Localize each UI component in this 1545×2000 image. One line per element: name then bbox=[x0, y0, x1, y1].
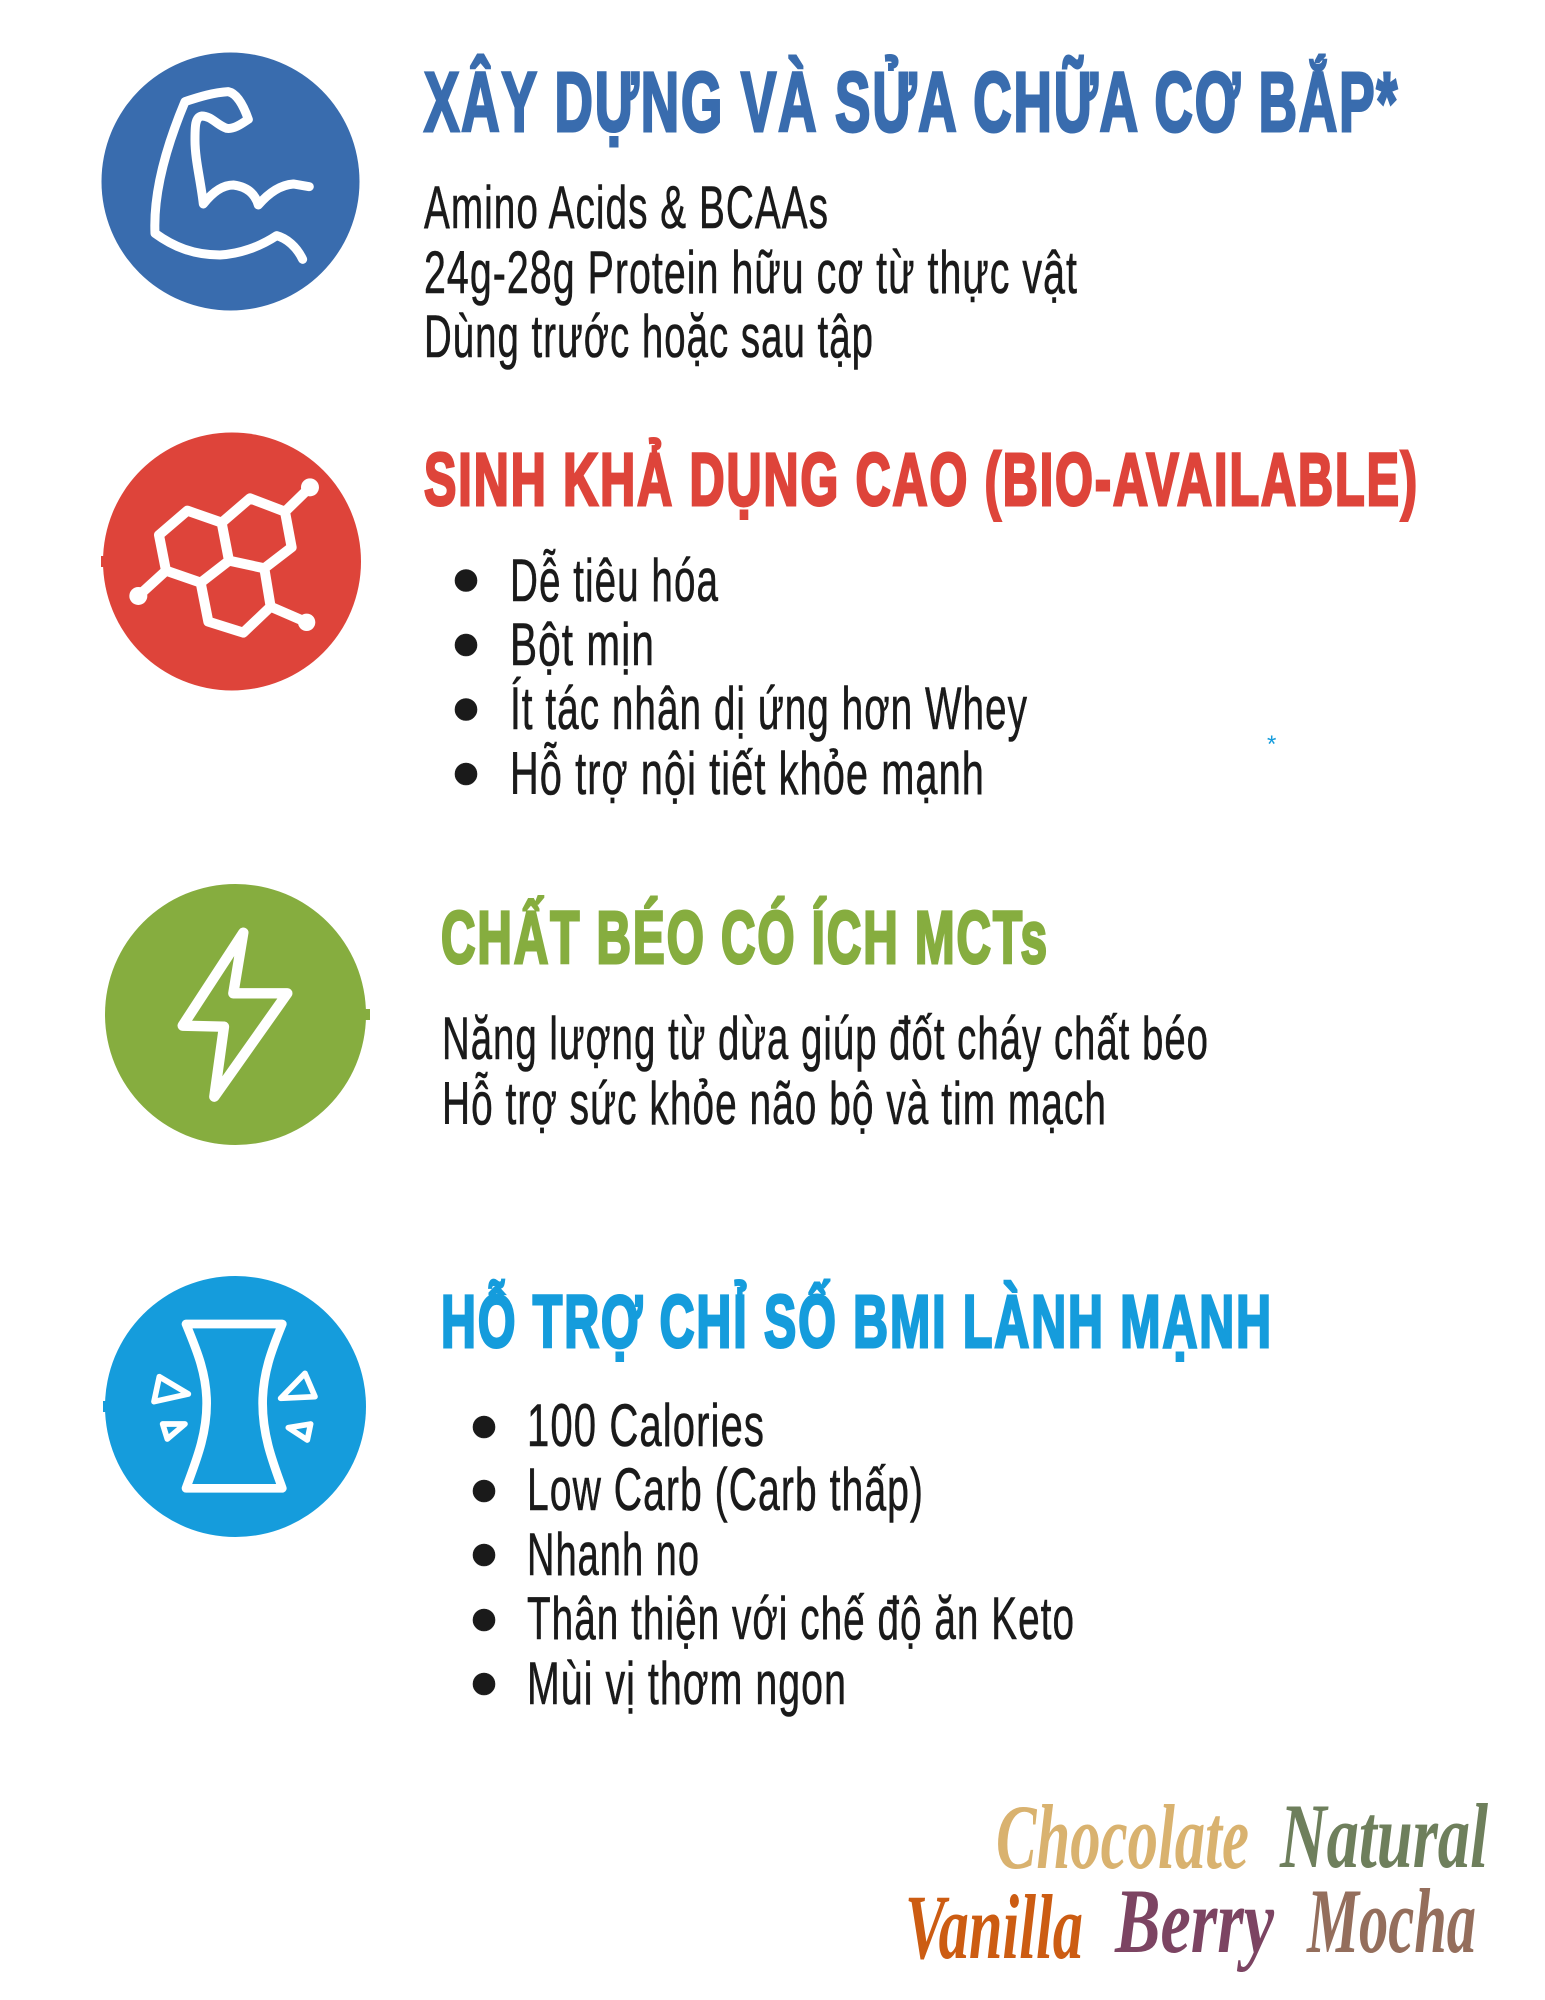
bullet list: bio-availability bbox=[455, 547, 1028, 807]
panel: healthy BMI bbox=[103, 1276, 1273, 1717]
bullet list: healthy BMI: 100 Calories bbox=[527, 1392, 765, 1459]
bullet list: healthy BMI: Thân thiện với chế độ ăn Keto bbox=[527, 1585, 1075, 1652]
bullet list: healthy BMI: Nhanh no bbox=[527, 1521, 700, 1588]
text block: muscle building: Amino Acids & BCAAs bbox=[424, 174, 829, 241]
icon: molecule bbox=[101, 432, 361, 690]
bullet list: healthy BMI bbox=[473, 1392, 1075, 1717]
heading: healthy fats: CHẤT BÉO CÓ ÍCH MCTs bbox=[441, 896, 1049, 979]
stray asterisk: * bbox=[1267, 731, 1276, 758]
panel: bio-availability bbox=[101, 432, 1419, 807]
text block: healthy fats bbox=[442, 1005, 1209, 1137]
panel: muscle building bbox=[102, 52, 1399, 370]
flavour names: Berry bbox=[1114, 1870, 1275, 1972]
icon: flexed arm bbox=[102, 52, 360, 310]
text block: muscle building bbox=[424, 174, 1078, 370]
bullet list: healthy BMI: Low Carb (Carb thấp) bbox=[527, 1456, 924, 1523]
flavour names: Chocolate bbox=[996, 1786, 1249, 1888]
icon: lightning bolt bbox=[105, 884, 370, 1145]
bullet list: bio-availability: Bột mịn bbox=[510, 611, 655, 678]
bullet list: bio-availability: Dễ tiêu hóa bbox=[510, 547, 719, 614]
bullet list: healthy BMI: Mùi vị thơm ngon bbox=[527, 1650, 847, 1717]
bullet list: bio-availability: Ít tác nhân dị ứng hơn Whey bbox=[510, 675, 1028, 742]
icon: slim waist bbox=[103, 1276, 366, 1537]
text block: muscle building: 24g-28g Protein hữu cơ từ thực vật bbox=[424, 239, 1078, 306]
bullet list: bio-availability: Hỗ trợ nội tiết khỏe mạnh bbox=[510, 740, 985, 807]
flavour names bbox=[905, 1785, 1488, 1978]
flavour names: Vanilla bbox=[905, 1876, 1083, 1978]
text block: healthy fats: Hỗ trợ sức khỏe não bộ và tim mạch bbox=[442, 1070, 1107, 1137]
panel: healthy fats bbox=[105, 884, 1209, 1145]
text block: muscle building: Dùng trước hoặc sau tập bbox=[424, 303, 874, 370]
